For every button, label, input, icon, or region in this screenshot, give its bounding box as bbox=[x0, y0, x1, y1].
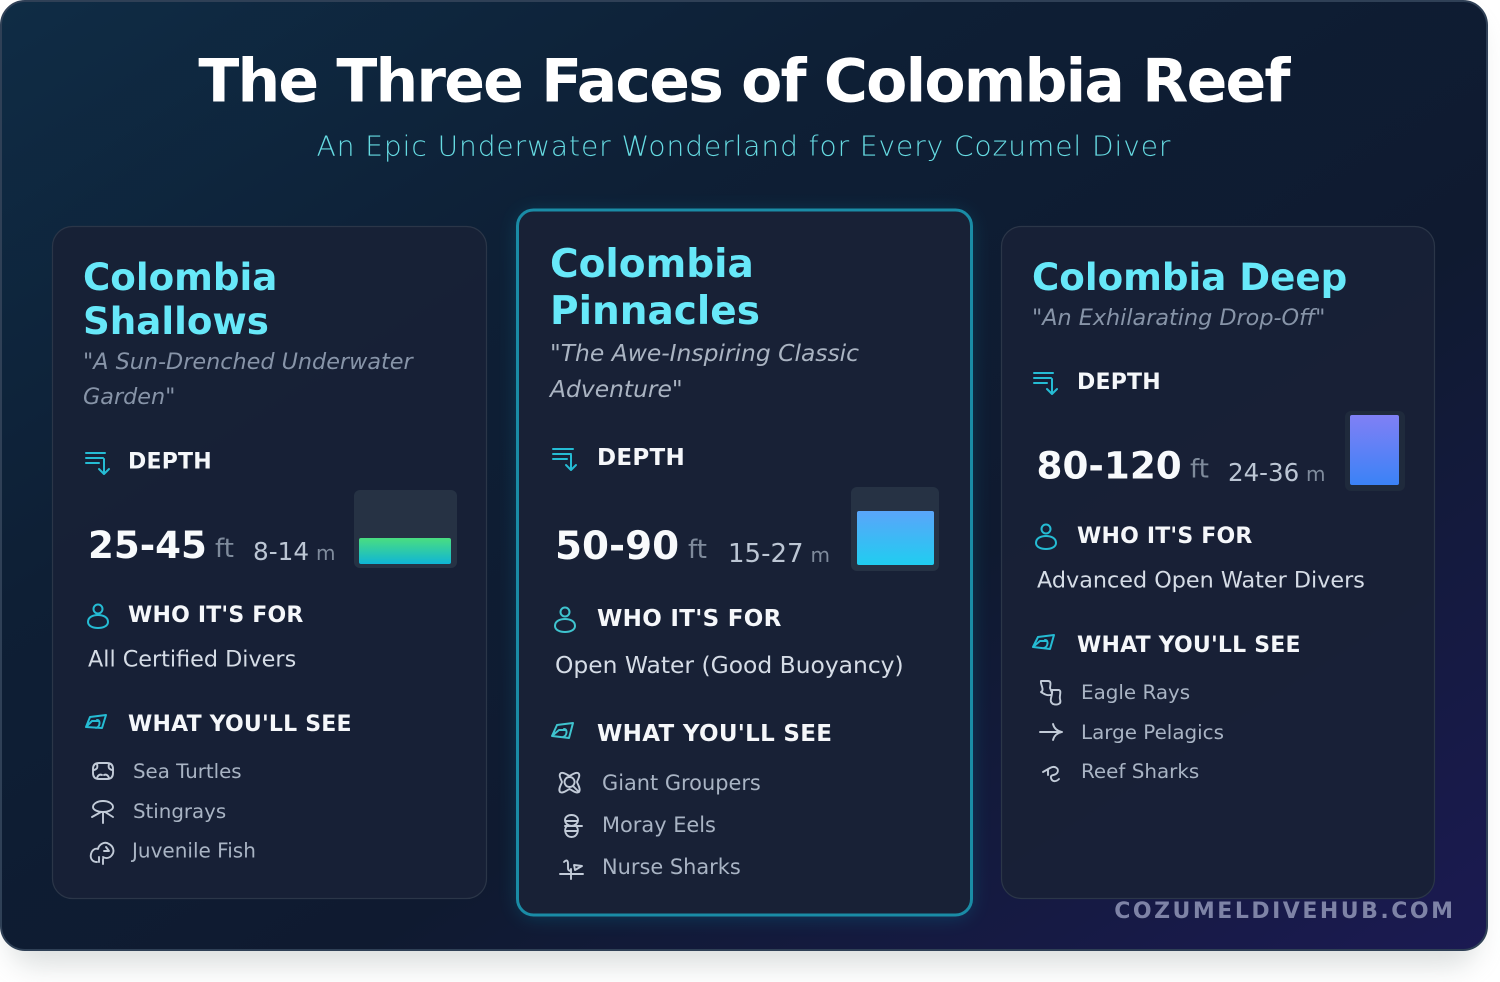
icon: fish card bbox=[86, 715, 106, 728]
who text: Open Water (Good Buoyancy) bbox=[555, 651, 904, 679]
depth value: ft bbox=[1190, 454, 1209, 484]
depth value: 50-90 bbox=[555, 524, 679, 569]
who text: All Certified Divers bbox=[88, 646, 296, 672]
depth gauge bbox=[851, 487, 939, 571]
icon: depth bbox=[1034, 373, 1057, 394]
who label: WHO IT'S FOR bbox=[1077, 524, 1253, 549]
depth label: DEPTH bbox=[597, 445, 685, 471]
see label: WHAT YOU'LL SEE bbox=[597, 721, 832, 747]
watermark: COZUMELDIVEHUB.COM bbox=[1114, 899, 1456, 924]
depth value: 24-36 bbox=[1228, 458, 1299, 487]
list: moray eels: Moray Eels bbox=[602, 813, 716, 837]
tagline: "The Awe-Inspiring Classic bbox=[550, 339, 859, 367]
heading: Colombia Deep: Colombia Deep bbox=[1032, 255, 1347, 299]
depth gauge bbox=[354, 490, 457, 568]
heading: Colombia Shallows: Shallows bbox=[83, 299, 269, 343]
list: juvenile fish: Juvenile Fish bbox=[130, 838, 256, 862]
see label: WHAT YOU'LL SEE bbox=[128, 712, 352, 737]
depth label: DEPTH bbox=[1077, 370, 1161, 395]
panel: Colombia Shallows bbox=[52, 226, 486, 898]
list: reef sharks: Reef Sharks bbox=[1081, 760, 1199, 783]
depth value bbox=[555, 524, 830, 569]
list: stingrays: Stingrays bbox=[133, 800, 226, 823]
icon: fish card bbox=[552, 723, 573, 738]
card glow: Colombia Pinnacles bbox=[517, 212, 972, 918]
depth value: ft bbox=[688, 535, 707, 565]
icon: depth bbox=[553, 449, 576, 470]
tagline: Garden" bbox=[83, 384, 175, 410]
icon: person bbox=[555, 608, 575, 632]
who text: Advanced Open Water Divers bbox=[1037, 568, 1365, 594]
depth value bbox=[88, 523, 335, 567]
who label: WHO IT'S FOR bbox=[597, 606, 782, 632]
title: The Three Faces of Colombia Reef bbox=[198, 46, 1291, 116]
list: large pelagics: Large Pelagics bbox=[1081, 721, 1224, 744]
depth value: 15-27 bbox=[728, 539, 804, 569]
panel: Colombia Pinnacles bbox=[518, 210, 972, 915]
icon: person bbox=[1036, 524, 1056, 549]
depth value: 25-45 bbox=[88, 523, 207, 567]
tagline: "A Sun-Drenched Underwater bbox=[83, 349, 414, 375]
list: stingrays bbox=[92, 800, 226, 823]
list: sea turtles: Sea Turtles bbox=[133, 760, 242, 783]
depth value: m bbox=[810, 543, 830, 567]
depth value: m bbox=[316, 541, 335, 565]
subtitle: An Epic Underwater Wonderland for Every Cozumel Diver bbox=[317, 130, 1171, 162]
icon: fish card bbox=[1033, 635, 1054, 649]
heading: Colombia Shallows: Colombia bbox=[83, 255, 277, 299]
panel: Colombia Deep bbox=[1002, 226, 1434, 898]
icon: person bbox=[88, 604, 108, 628]
list: nurse sharks: Nurse Sharks bbox=[602, 855, 741, 879]
depth value: m bbox=[1306, 462, 1325, 486]
who label: WHO IT'S FOR bbox=[128, 603, 304, 628]
tagline: "An Exhilarating Drop-Off" bbox=[1032, 305, 1325, 331]
icon: depth bbox=[86, 453, 109, 474]
see label: WHAT YOU'LL SEE bbox=[1077, 633, 1301, 658]
depth value: 8-14 bbox=[253, 537, 309, 566]
heading: Colombia Pinnacles: Pinnacles bbox=[550, 289, 760, 334]
depth label: DEPTH bbox=[128, 450, 212, 474]
depth value: 80-120 bbox=[1036, 444, 1182, 488]
depth value bbox=[1036, 444, 1325, 488]
depth gauge bbox=[1345, 411, 1405, 491]
list: eagle rays: Eagle Rays bbox=[1081, 681, 1190, 704]
depth value: ft bbox=[215, 534, 234, 564]
heading: Colombia Pinnacles: Colombia bbox=[550, 242, 754, 287]
list: giant groupers: Giant Groupers bbox=[602, 771, 761, 795]
tagline: Adventure" bbox=[548, 375, 683, 403]
